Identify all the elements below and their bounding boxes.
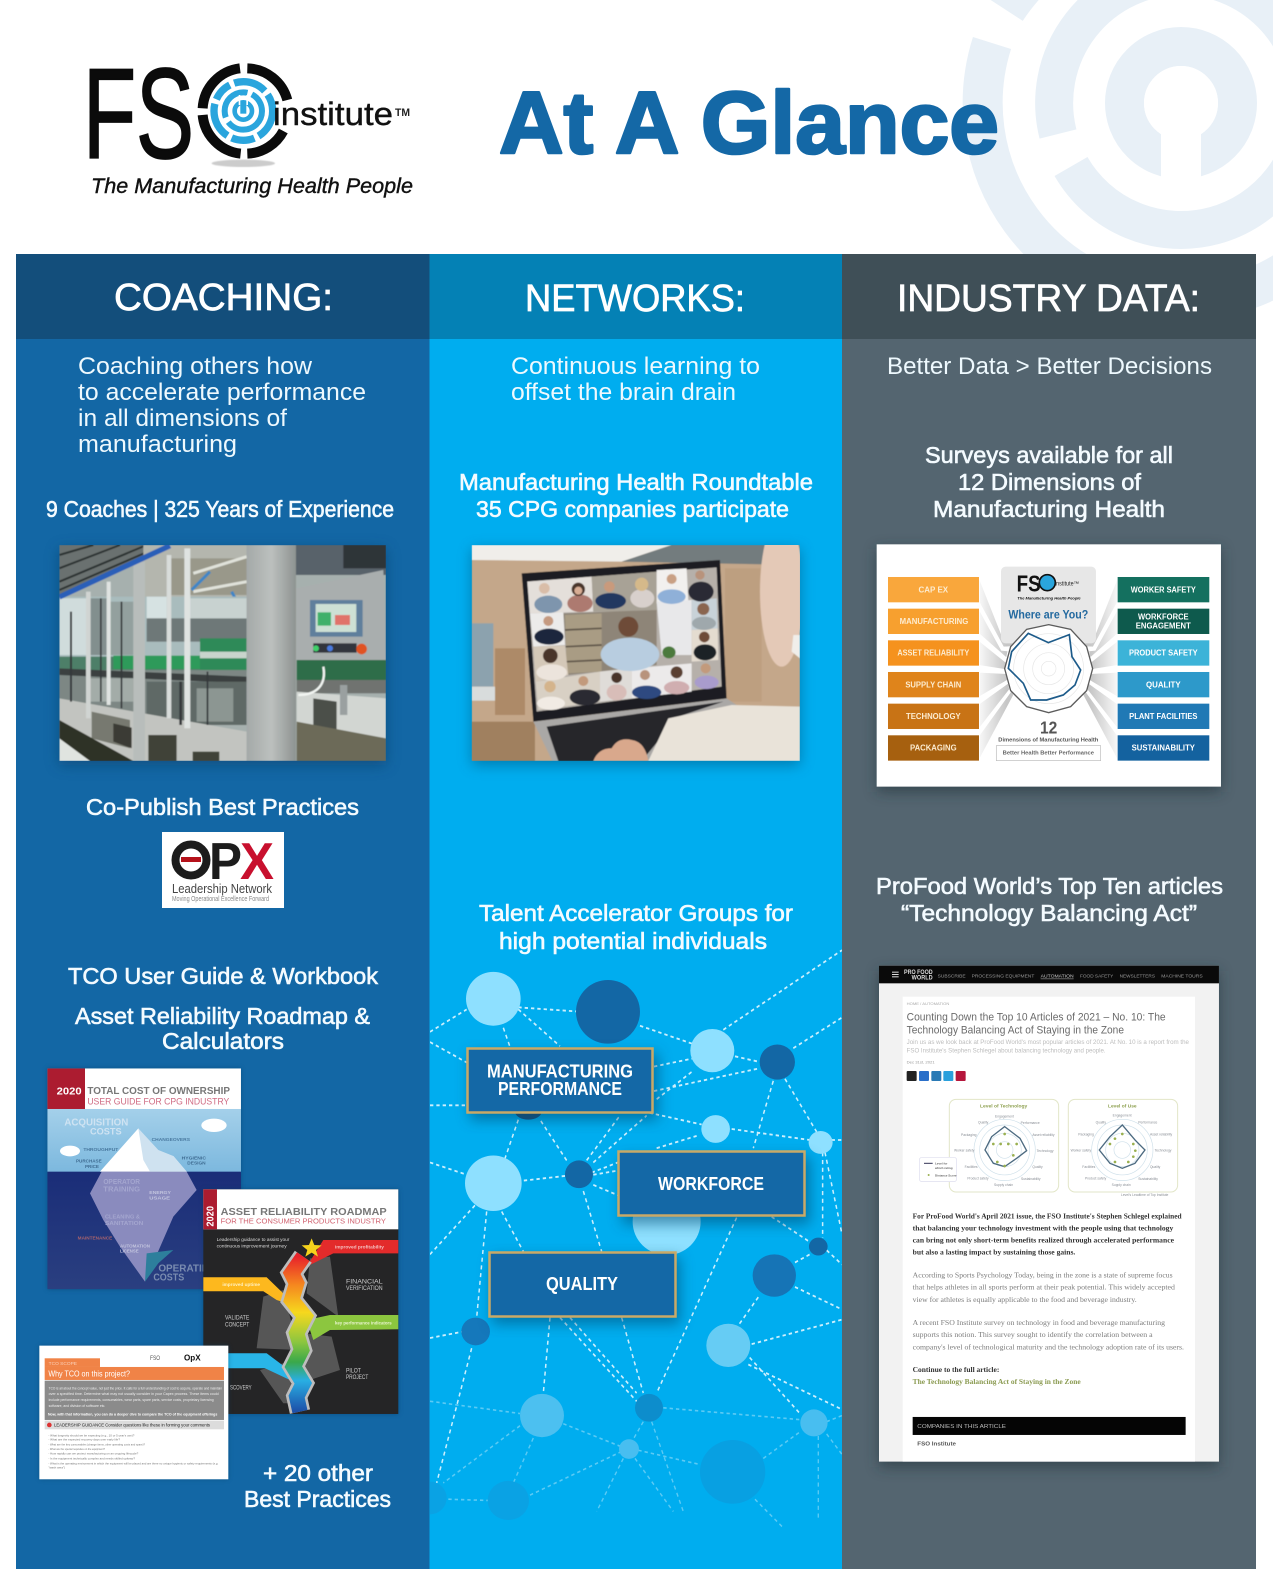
document: TCO scope workbook page: over a specified time. Determine what may not usually consider in your Capex process. These items could <box>49 1392 219 1396</box>
document: TCO user guide: LICENSE <box>120 1249 139 1254</box>
article body text: The Technology Balancing Act of Staying in the Zone <box>913 1378 1081 1386</box>
document: TCO scope workbook page: OpX <box>184 1354 201 1363</box>
logo trademark: TM <box>395 107 410 119</box>
label box: quality <box>490 1252 680 1324</box>
connector wedges <box>979 577 1118 761</box>
small logo <box>1017 570 1081 600</box>
networks intro text <box>511 353 760 406</box>
document: TCO scope workbook page: - What are the expected recovery days over early life? <box>48 1438 121 1442</box>
document: TCO user guide: OPERATOR <box>103 1177 141 1186</box>
top ten heading: ProFood World’s Top Ten articles <box>876 873 1223 899</box>
document: TCO user guide: TOTAL COST OF OWNERSHIP <box>87 1086 230 1097</box>
label box: workforce <box>618 1152 810 1224</box>
network links lower <box>430 1401 842 1528</box>
article heading: Counting Down the Top 10 Articles of 2021 – No. 10: The <box>907 1012 1166 1024</box>
article body text: that balancing your technology investment with the people using that technology <box>913 1224 1174 1232</box>
TCO guide heading: TCO User Guide & Workbook <box>68 963 379 989</box>
logo: OpX Leadership Network: P <box>209 833 242 891</box>
document: TCO user guide: DESIGN <box>187 1161 206 1166</box>
coaching intro text: to accelerate performance <box>78 379 366 406</box>
asset reliability heading: Calculators <box>162 1028 284 1054</box>
background watermark logo <box>983 0 1273 301</box>
logo word institute: institute <box>273 96 393 132</box>
article body text: supports this notion. This survey sought to identify the correlation between a <box>913 1331 1153 1339</box>
logo: OpX Leadership Network: Moving Operational Excellence Forward <box>172 896 269 903</box>
article body text: For ProFood World's April 2021 issue, the FSO Institute's Stephen Schlegel explained <box>913 1212 1182 1220</box>
document: TCO scope workbook page: "wash area") <box>48 1466 65 1470</box>
coaching header <box>16 254 430 339</box>
document: TCO scope workbook page: software, and division of software etc. <box>49 1404 105 1408</box>
asset reliability heading <box>75 1003 370 1054</box>
article nav bar: NEWSLETTERS <box>1120 974 1155 979</box>
asset reliability heading: Asset Reliability Roadmap & <box>75 1003 370 1029</box>
top ten heading <box>876 873 1223 926</box>
infographic: 12 dimensions card: 12 <box>1040 717 1057 737</box>
left dimension bars: TECHNOLOGY <box>906 712 961 721</box>
article radar charts: Engagement <box>1113 1114 1132 1118</box>
document: TCO scope workbook page: - How rapidly can we protect manufacturing on an ongoing lifecycle? <box>48 1452 139 1456</box>
document: TCO scope workbook page: TCO SCOPE <box>49 1361 78 1367</box>
document: asset reliability roadmap: continuous improvement journey <box>217 1244 287 1250</box>
panel: industry data column <box>842 254 1256 1569</box>
document: asset reliability roadmap: Leadership guidance to assist your <box>217 1237 290 1243</box>
article radar charts: Asset reliability <box>1032 1133 1055 1137</box>
surveys heading: Manufacturing Health <box>933 496 1165 522</box>
document: TCO user guide: 2020 <box>57 1086 82 1097</box>
document: TCO user guide: ACQUISITION <box>64 1117 128 1128</box>
infographic: 12 dimensions card: Where are You? <box>1008 608 1088 622</box>
best practice documents <box>39 1068 398 1479</box>
other best practices note <box>244 1460 391 1512</box>
article nav bar: WORLD <box>912 975 933 981</box>
document: TCO user guide: COSTS <box>90 1126 122 1136</box>
document: asset reliability roadmap: VALIDATE <box>225 1315 249 1321</box>
surveys heading <box>925 442 1173 522</box>
article radar charts <box>919 1099 1178 1197</box>
top ten heading: “Technology Balancing Act” <box>901 900 1197 926</box>
coaching header: COACHING: <box>114 277 333 319</box>
article radar charts: Level for <box>935 1161 948 1165</box>
article radar charts: Packaging <box>961 1133 977 1137</box>
article radar charts: Worker safety <box>1071 1148 1091 1152</box>
document: asset reliability roadmap <box>203 1189 398 1414</box>
document: asset reliability roadmap: FINANCIAL <box>346 1279 383 1285</box>
article heading <box>907 1002 1190 1064</box>
document: TCO user guide: USAGE <box>149 1195 171 1201</box>
talent groups heading: high potential individuals <box>499 928 767 954</box>
co-publish heading: Co-Publish Best Practices <box>86 794 359 820</box>
left dimension bars: CAP EX <box>919 585 949 594</box>
panel: networks column <box>413 254 842 1569</box>
document: asset reliability roadmap: ASSET RELIABILITY ROADMAP <box>221 1207 387 1218</box>
article radar charts: Supply chain <box>1112 1183 1131 1187</box>
label box: quality: QUALITY <box>546 1274 618 1294</box>
article radar charts: Facilities <box>965 1165 978 1169</box>
coaching intro text <box>78 353 366 458</box>
article body text: company's level of technological maturity and the technology adoption rate of its users. <box>913 1343 1184 1351</box>
left dimension bars: SUPPLY CHAIN <box>905 680 962 689</box>
document: asset reliability roadmap: FOR THE CONSUMER PRODUCTS INDUSTRY <box>221 1216 386 1225</box>
logo tagline: The Manufacturing Health People <box>91 175 413 198</box>
article body text: but also a lasting impact by sustaining those gains. <box>913 1249 1076 1257</box>
article radar charts: Facilities <box>1082 1165 1096 1169</box>
right dimension bars: PRODUCT SAFETY <box>1129 649 1198 658</box>
infographic: 12 dimensions card: Better Health Better Performance <box>1003 751 1094 757</box>
document: TCO user guide: USER GUIDE FOR CPG INDUSTRY <box>87 1096 230 1106</box>
photo: bottling machinery <box>59 545 386 765</box>
article radar charts: which rating <box>934 1166 953 1170</box>
article radar charts: Worker safety <box>954 1149 975 1153</box>
logo: OpX Leadership Network <box>162 832 284 908</box>
left dimension bars <box>888 577 979 761</box>
document: TCO scope workbook page: Now, with that information, you can do a deeper dive to compare the TCO of the equipment offerings <box>48 1413 217 1417</box>
surveys heading: 12 Dimensions of <box>958 469 1142 495</box>
document: TCO scope workbook page: - What longevity should we be expecting (e.g., 10 or 5 year's use)? <box>48 1434 135 1438</box>
logo letters FS: FS <box>83 43 194 186</box>
document: asset reliability roadmap: improved uptime <box>222 1282 260 1288</box>
article radar charts: Engagement <box>995 1114 1014 1118</box>
label box: workforce: WORKFORCE <box>658 1174 764 1194</box>
document: TCO user guide: SANITATION <box>105 1221 143 1227</box>
document: TCO scope workbook page: TCO is all about the concept value, not just the price. It calls for a full understanding of cost to acquire, operate and maintain <box>49 1386 222 1390</box>
article radar charts: Level of Use <box>1108 1103 1137 1108</box>
article radar charts: Supply chain <box>994 1183 1013 1187</box>
social share buttons <box>907 1071 966 1081</box>
document: asset reliability roadmap: key performance indicators <box>335 1320 392 1326</box>
article screenshot <box>879 966 1219 1467</box>
companies bar <box>913 1417 1186 1447</box>
article heading: Technology Balancing Act of Staying in the Zone <box>907 1024 1124 1036</box>
article radar charts: Quality <box>1032 1165 1043 1169</box>
right dimension bars: QUALITY <box>1146 680 1181 689</box>
roundtable heading: Manufacturing Health Roundtable <box>459 469 813 495</box>
network links upper <box>430 950 842 1483</box>
other best practices note: Best Practices <box>244 1486 391 1512</box>
label box: manufacturing performance <box>468 1048 658 1120</box>
infographic: 12 dimensions card: Dimensions of Manufacturing Health <box>998 738 1099 744</box>
networks header: NETWORKS: <box>525 278 745 320</box>
document: asset reliability roadmap: PILOT <box>346 1369 361 1375</box>
document: asset reliability roadmap: CONCEPT <box>225 1323 250 1329</box>
article nav bar: AUTOMATION <box>1041 974 1074 979</box>
small logo: The Manufacturing Health People <box>1017 595 1081 600</box>
document: TCO scope workbook page: - What is the operating environment in which the equipment will be placed and are there no unique hygienic or safety requirements (e.g. <box>48 1461 219 1465</box>
article body text: that helps athletes in all sports perform at their peak potential. This widely accepted <box>913 1284 1176 1292</box>
article radar charts: Performance <box>1021 1121 1040 1125</box>
article radar charts: Distance Score <box>935 1173 957 1177</box>
coaching intro text: in all dimensions of <box>78 405 287 432</box>
article radar charts: Asset reliability <box>1150 1132 1173 1136</box>
industry data header <box>842 254 1256 339</box>
document: asset reliability roadmap: improved profitability <box>335 1245 384 1251</box>
right dimension bars: WORKFORCE <box>1138 613 1189 622</box>
coaches heading: 9 Coaches | 325 Years of Experience <box>46 496 394 522</box>
article radar charts: Quality <box>1096 1120 1106 1124</box>
article body text <box>913 1212 1184 1386</box>
surveys heading: Surveys available for all <box>925 442 1173 468</box>
article heading: FSO Institute's Stephen Schlegel about balancing technology and people. <box>907 1049 1106 1055</box>
logo: OpX Leadership Network: X <box>240 833 274 891</box>
document: TCO user guide: CHANGEOVERS <box>152 1137 191 1143</box>
document: TCO user guide <box>47 1068 241 1289</box>
networks intro text: offset the brain drain <box>511 379 736 406</box>
left dimension bars: MANUFACTURING <box>900 617 968 626</box>
right dimension bars: WORKER SAFETY <box>1131 585 1196 594</box>
document: TCO user guide: OPERATING <box>158 1264 217 1275</box>
document: TCO user guide: PRICE <box>85 1164 99 1169</box>
article nav bar: SUBSCRIBE <box>938 974 966 979</box>
document: TCO user guide: HYGIENIC <box>182 1155 207 1160</box>
networks header <box>430 254 842 339</box>
document: TCO scope workbook page: LEADERSHIP GUIDANCE Consider questions like these in forming your comments <box>54 1423 211 1428</box>
logo: FSO Institute <box>83 43 413 198</box>
roundtable heading <box>459 469 813 522</box>
document: TCO user guide: COSTS <box>153 1273 185 1284</box>
article radar charts: Product safety <box>1085 1177 1107 1181</box>
article radar charts: Product safety <box>967 1177 989 1181</box>
article nav bar: FOOD SAFETY <box>1080 974 1113 979</box>
article body text: Continue to the full article: <box>913 1366 999 1374</box>
article radar charts: Level's Leadtime of Top Institute <box>1121 1193 1169 1197</box>
radar chart <box>1005 625 1093 713</box>
document: asset reliability roadmap: 2020 <box>205 1206 216 1227</box>
network diagram <box>413 950 842 1528</box>
article body text: A recent FSO Institute survey on technology in food and beverage manufacturing <box>913 1319 1166 1327</box>
networks intro text: Continuous learning to <box>511 353 760 380</box>
document: TCO user guide: AUTOMATION <box>120 1244 150 1249</box>
document: TCO user guide: CLEANING & <box>105 1214 140 1220</box>
right dimension bars <box>1118 577 1209 761</box>
document: TCO scope workbook page <box>39 1346 228 1479</box>
roundtable heading: 35 CPG companies participate <box>476 496 789 522</box>
other best practices note: + 20 other <box>263 1460 373 1486</box>
document: asset reliability roadmap: SCOVERY <box>230 1385 252 1391</box>
logo ring emblem <box>203 68 287 167</box>
left dimension bars: PACKAGING <box>910 744 957 753</box>
article radar charts: Sustainability <box>1021 1177 1041 1181</box>
article radar charts: Sustainability <box>1138 1177 1158 1181</box>
industry data header: INDUSTRY DATA: <box>897 278 1200 320</box>
document: asset reliability roadmap: PROJECT <box>346 1375 369 1381</box>
small logo: institute™ <box>1055 580 1079 587</box>
talent groups heading <box>479 900 793 954</box>
title: At A Glance <box>499 73 999 172</box>
document: TCO user guide: ENERGY <box>149 1190 172 1196</box>
infographic: 12 dimensions card <box>877 544 1221 792</box>
article radar charts: Quality <box>978 1121 989 1125</box>
article radar charts: Level of Technology <box>980 1103 1028 1108</box>
label box: manufacturing performance: MANUFACTURING <box>487 1062 633 1082</box>
companies bar: FSO Institute <box>917 1441 956 1447</box>
article body text: can bring not only short-term benefits realized through accelerated performance <box>913 1236 1174 1244</box>
panel: coaching column <box>16 254 430 1569</box>
article body text: view for athletes is equally applicable to the food and beverage industry. <box>913 1296 1137 1304</box>
document: TCO user guide: THROUGHPUT <box>83 1147 118 1153</box>
document: TCO scope workbook page: - Is the equipment technically complex and needs skilled upkeep? <box>48 1456 136 1460</box>
article nav bar: MACHINE TOURS <box>1161 974 1203 979</box>
article radar charts: Technology <box>1155 1148 1172 1152</box>
industry data intro text: Better Data > Better Decisions <box>887 353 1212 380</box>
article radar charts: Quality <box>1150 1165 1161 1169</box>
article body text: According to Sports Psychology Today, being in the zone is a state of supreme focus <box>913 1272 1173 1280</box>
document: asset reliability roadmap: VERIFICATION <box>346 1286 383 1292</box>
document: TCO scope workbook page: include performance requirements, consumables, wear parts, spare parts, service costs, proprietary licensing <box>49 1398 214 1402</box>
right dimension bars: PLANT FACILITIES <box>1129 712 1198 721</box>
photo: video conference on laptop <box>472 517 803 765</box>
article heading: Dec 31st, 2021 <box>907 1060 935 1064</box>
companies bar: COMPANIES IN THIS ARTICLE <box>917 1424 1007 1430</box>
document: TCO scope workbook page: - What are the key consumables (change items, other operating costs and spare)? <box>48 1442 146 1446</box>
article radar charts: Performance <box>1138 1120 1158 1124</box>
document: TCO scope workbook page: FSO <box>150 1355 160 1362</box>
coaching intro text: Coaching others how <box>78 353 313 380</box>
article nav bar <box>879 966 1219 983</box>
article radar charts: Technology <box>1037 1149 1054 1153</box>
talent groups heading: Talent Accelerator Groups for <box>479 900 793 926</box>
logo: OpX Leadership Network: Leadership Network <box>172 881 272 896</box>
label box: manufacturing performance: PERFORMANCE <box>498 1079 622 1099</box>
document: TCO user guide: MAINTENANCE <box>78 1235 112 1240</box>
document: TCO user guide: PURCHASE <box>76 1159 102 1164</box>
coaching intro text: manufacturing <box>78 431 237 458</box>
article heading: Join us as we look back at ProFood World's most popular articles of 2021. At No. 10 is a report from the <box>907 1040 1190 1046</box>
article nav bar: PRO FOOD <box>904 970 933 976</box>
left dimension bars: ASSET RELIABILITY <box>897 649 970 658</box>
document: TCO scope workbook page: - What are the special requisites on the equipment? <box>48 1447 105 1451</box>
right dimension bars: SUSTAINABILITY <box>1132 744 1196 753</box>
network nodes <box>413 972 833 1520</box>
small logo: FS <box>1017 570 1041 596</box>
document: TCO scope workbook page: Why TCO on this project? <box>48 1370 130 1379</box>
article nav bar: PROCESSING EQUIPMENT <box>972 974 1034 979</box>
article heading: HOME / AUTOMATION <box>907 1002 950 1006</box>
article radar charts: Packaging <box>1078 1132 1094 1136</box>
right dimension bars: ENGAGEMENT <box>1136 622 1191 631</box>
document: TCO user guide: TRAINING <box>103 1185 140 1194</box>
